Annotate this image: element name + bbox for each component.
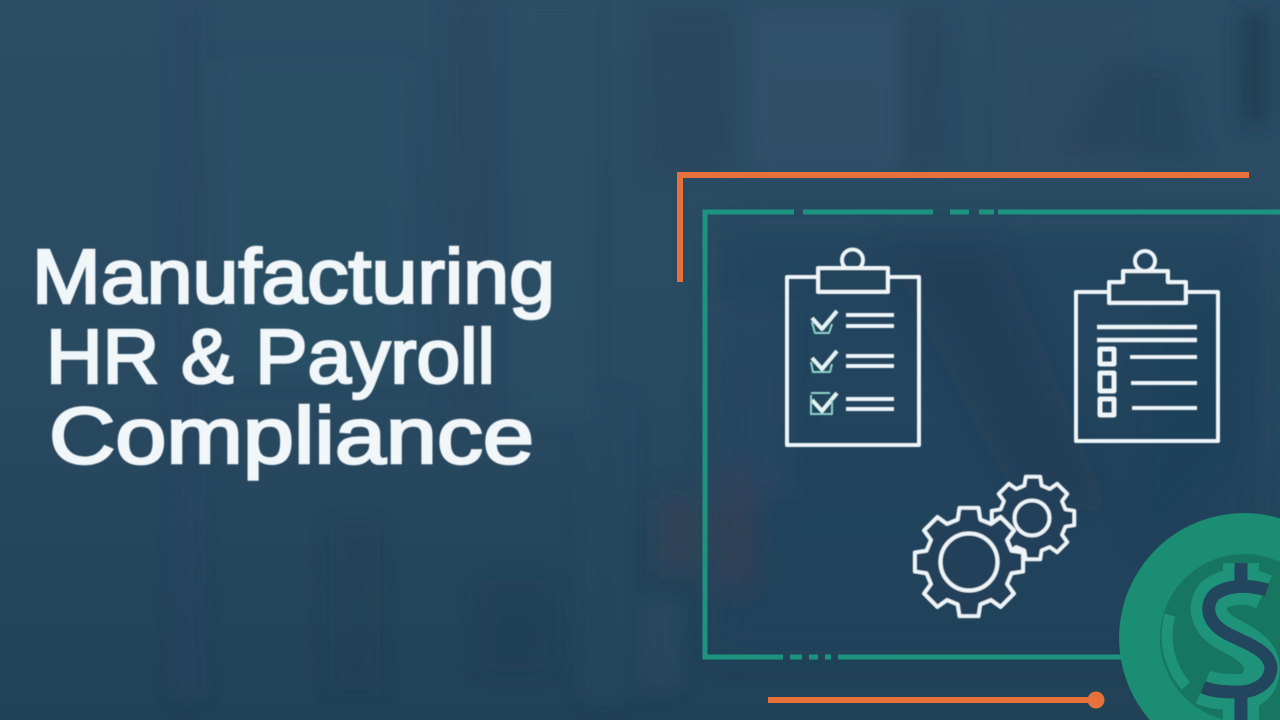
green dashed frame	[705, 212, 1280, 657]
clipboard board	[787, 277, 919, 445]
icon: clipboard with checklist	[787, 250, 919, 445]
form row 2	[1100, 373, 1197, 391]
large gear	[915, 508, 1023, 616]
icon: gears	[915, 477, 1074, 616]
check item 1	[812, 311, 894, 333]
form row 1	[1100, 349, 1197, 364]
clipboard ring	[842, 250, 863, 270]
dollar sign	[1203, 563, 1271, 720]
title line 3: Compliance	[49, 391, 534, 480]
title line 2: HR & Payroll	[46, 314, 495, 400]
check item 2	[811, 351, 894, 372]
title	[32, 234, 555, 480]
form stepped clip	[1109, 271, 1186, 303]
form ring	[1135, 251, 1155, 271]
small gear	[992, 477, 1074, 559]
orange corner bracket	[680, 175, 1249, 282]
icon: clipboard with form	[1076, 251, 1218, 441]
form row 3	[1100, 399, 1197, 415]
icon: dollar coin	[1119, 513, 1280, 720]
form header lines	[1097, 327, 1197, 340]
orange line with dot	[768, 692, 1104, 708]
check item 3	[811, 393, 894, 414]
coin inner arc	[1167, 615, 1186, 686]
coin outer ring	[1119, 513, 1280, 720]
form board	[1076, 292, 1218, 441]
coin inner disc	[1160, 554, 1280, 720]
title line 1: Manufacturing	[32, 234, 555, 320]
clipboard clip	[818, 268, 888, 292]
